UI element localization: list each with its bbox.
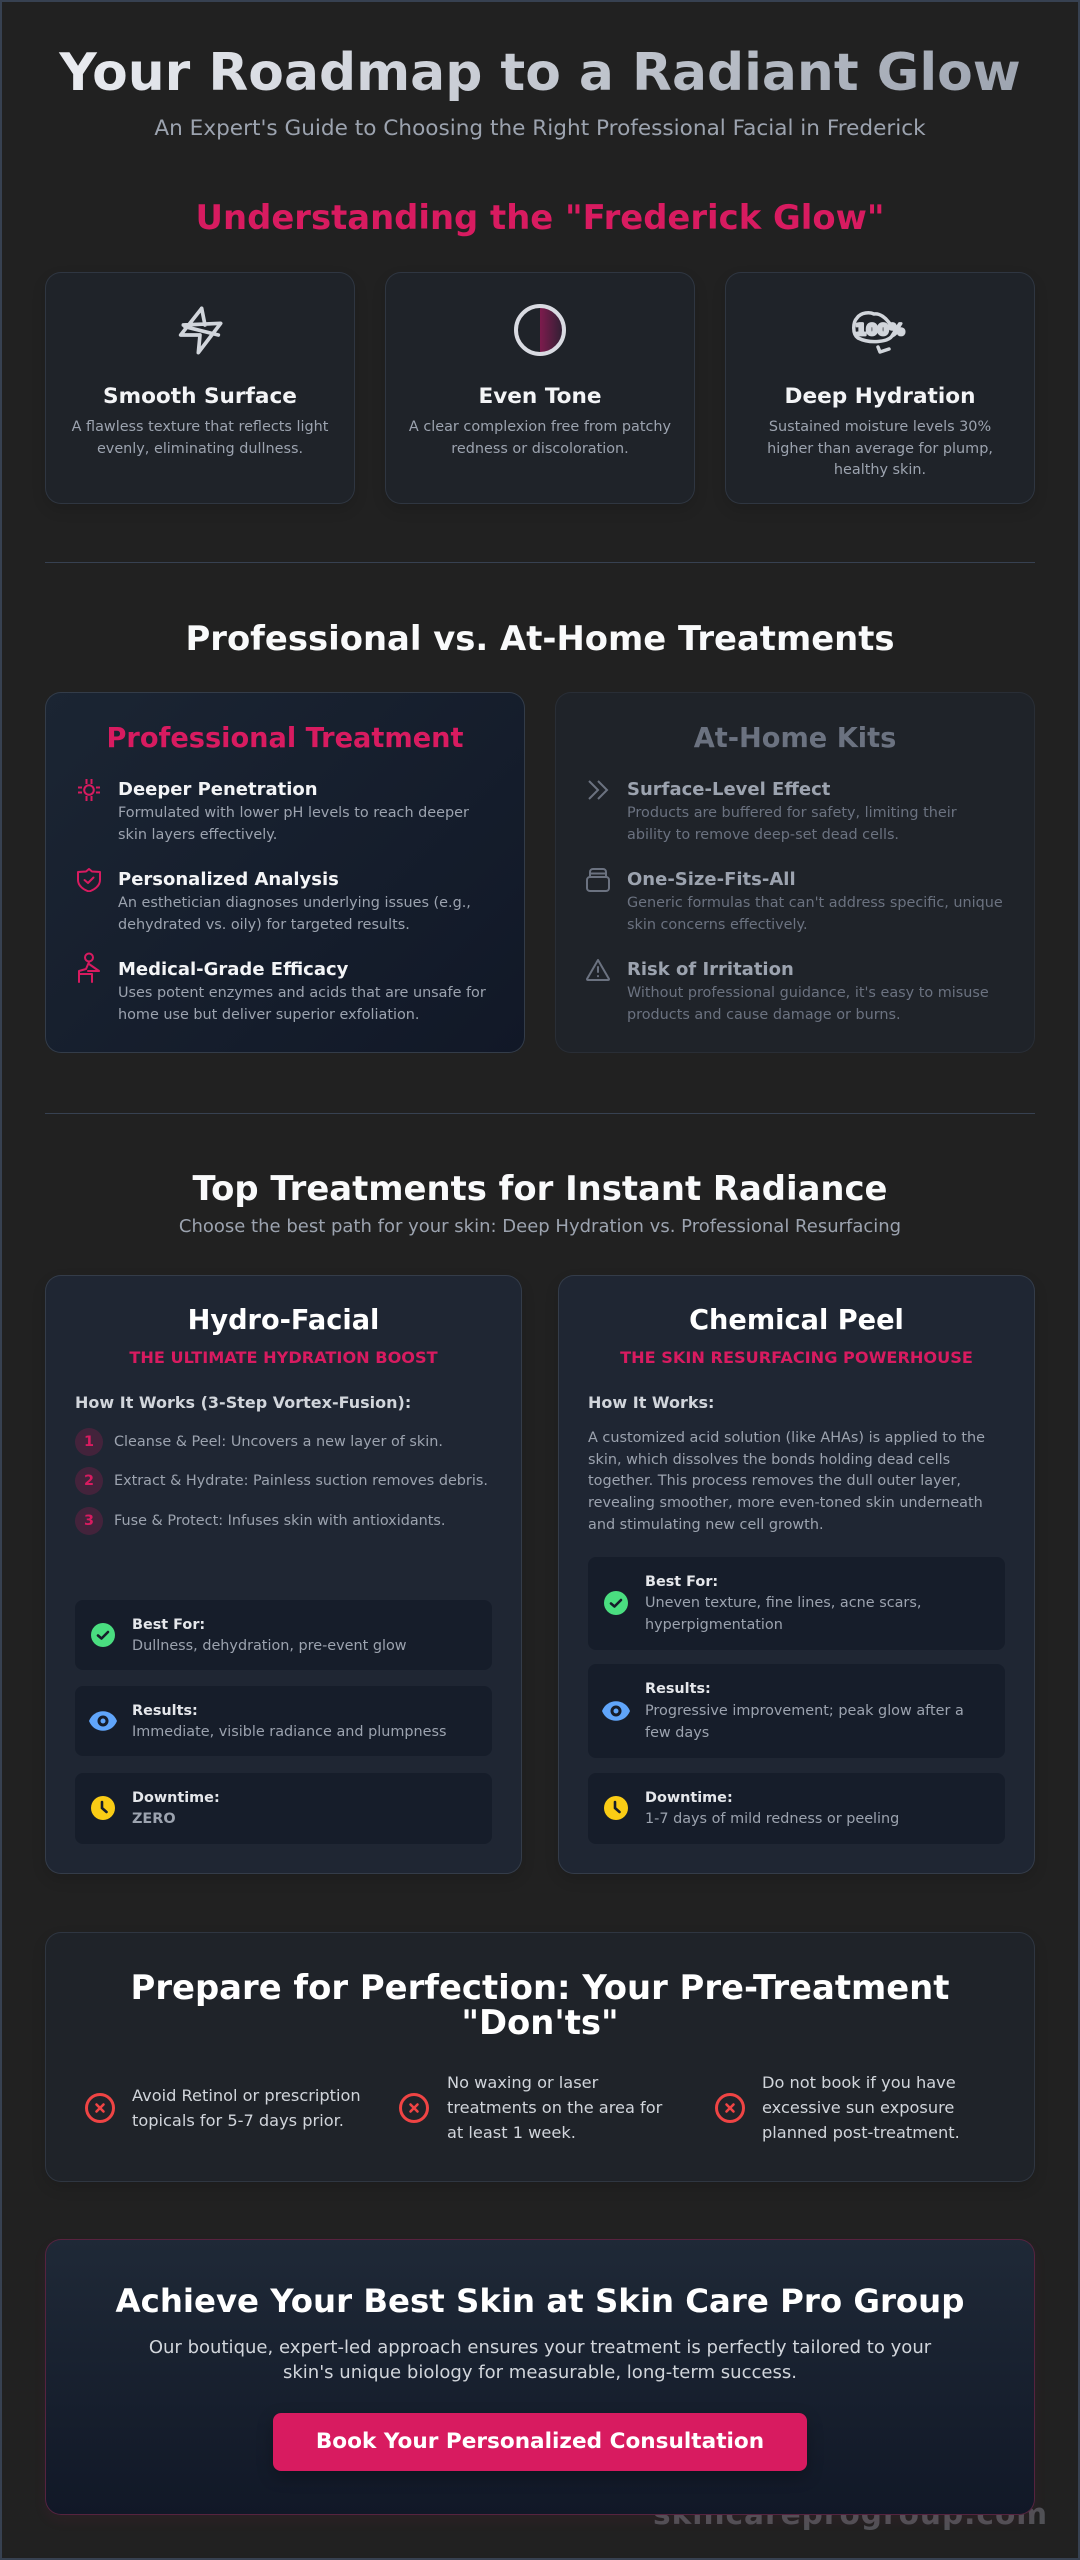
item description: dehydrated vs. oily) for targeted results.	[118, 917, 410, 933]
step 1: 1	[84, 1434, 94, 1450]
card description	[409, 419, 671, 457]
best for box: Uneven texture, fine lines, acne scars,	[645, 1595, 921, 1611]
panel: call to action	[45, 2239, 1035, 2515]
item description	[627, 805, 957, 843]
card description	[72, 419, 328, 457]
card title: Chemical Peel	[689, 1305, 904, 1336]
how it works text	[588, 1430, 985, 1533]
step 3: Fuse & Protect: Infuses skin with antioxidants.	[114, 1513, 445, 1529]
icon: eye	[89, 1711, 117, 1731]
step 1	[75, 1428, 443, 1456]
icon: x circle	[85, 2093, 115, 2123]
step 2: Extract & Hydrate: Painless suction removes debris.	[114, 1473, 488, 1489]
item title: Medical-Grade Efficacy	[118, 958, 348, 980]
best for box: Dullness, dehydration, pre-event glow	[132, 1638, 407, 1654]
cta text: Our boutique, expert-led approach ensures your treatment is perfectly tailored to your	[149, 2336, 931, 2358]
card title: Even Tone	[478, 384, 602, 409]
don't 3: planned post-treatment.	[762, 2123, 960, 2142]
panel title	[131, 1968, 949, 2042]
item description	[627, 895, 1003, 933]
item description: home use but deliver superior exfoliation.	[118, 1007, 420, 1023]
heading: understanding: Understanding the "Frederick Glow"	[196, 198, 884, 237]
don't 2: at least 1 week.	[447, 2123, 576, 2142]
card description: higher than average for plump,	[767, 441, 993, 457]
icon: x circle	[715, 2092, 745, 2122]
best for box: Best For:	[645, 1574, 718, 1590]
cta button	[273, 2413, 807, 2471]
step 3	[75, 1507, 445, 1535]
item description	[627, 985, 989, 1023]
how it works text: and stimulating new cell growth.	[588, 1517, 824, 1533]
item: risk of irritation	[586, 958, 989, 1023]
item description	[118, 895, 471, 933]
best for box	[588, 1557, 1005, 1650]
don't 1: Avoid Retinol or prescription	[132, 2086, 361, 2104]
item description: Products are buffered for safety, limiting their	[627, 805, 957, 821]
results box: few days	[645, 1725, 709, 1741]
card subtitle: THE ULTIMATE HYDRATION BOOST	[129, 1348, 438, 1366]
panel title: Prepare for Perfection: Your Pre-Treatment	[131, 1968, 949, 2006]
cta title: Achieve Your Best Skin at Skin Care Pro Group	[116, 2282, 964, 2320]
item: medical-grade efficacy	[78, 952, 486, 1023]
icon: jar	[586, 868, 610, 892]
item description: skin concerns effectively.	[627, 917, 808, 933]
panel: deep hydration	[725, 272, 1035, 504]
results box: Progressive improvement; peak glow after a	[645, 1703, 964, 1719]
how it works text: revealing smoother, more even-toned skin underneath	[588, 1495, 983, 1511]
don't 3	[715, 2070, 960, 2145]
panel: chemical peel	[558, 1275, 1035, 1874]
results box: Immediate, visible radiance and plumpness	[132, 1724, 446, 1740]
item description: Generic formulas that can't address specific, unique	[627, 895, 1003, 911]
panel: smooth surface	[45, 272, 355, 504]
icon: sun	[78, 779, 100, 801]
subtitle: An Expert's Guide to Choosing the Right Professional Facial in Frederick	[154, 116, 926, 140]
step 1: Cleanse & Peel: Uncovers a new layer of skin.	[114, 1434, 443, 1450]
item description: An esthetician diagnoses underlying issues (e.g.,	[118, 895, 471, 911]
heading: top treatments: Top Treatments for Instant Radiance	[192, 1169, 888, 1208]
item description	[118, 805, 469, 843]
card description: Sustained moisture levels 30%	[769, 419, 991, 435]
results box: Results:	[132, 1702, 198, 1718]
don't 2: No waxing or laser	[447, 2073, 598, 2092]
icon: hydration cloud	[852, 311, 906, 354]
item description: Formulated with lower pH levels to reach deeper	[118, 805, 469, 821]
item: one-size-fits-all	[586, 868, 1003, 933]
icon: seated figure	[78, 952, 100, 983]
downtime box: ZERO	[132, 1811, 176, 1827]
card description: A clear complexion free from patchy	[409, 419, 671, 435]
item: deeper penetration	[78, 778, 469, 843]
icon: half circle	[514, 304, 566, 356]
panel title: "Don'ts"	[461, 2002, 619, 2042]
card title: Deep Hydration	[785, 384, 975, 409]
results box	[75, 1686, 492, 1756]
step 2	[75, 1467, 488, 1495]
panel: hydro-facial	[45, 1275, 522, 1874]
panel heading: At-Home Kits	[694, 723, 896, 754]
icon: lightning bolt	[178, 306, 223, 354]
section subtitle: Choose the best path for your skin: Deep Hydration vs. Professional Resurfacing	[179, 1216, 901, 1237]
panel heading: Professional Treatment	[106, 723, 464, 754]
cta button: Book Your Personalized Consultation	[316, 2429, 764, 2454]
results box: Results:	[645, 1681, 711, 1697]
item: personalized analysis	[77, 868, 471, 933]
card title: Smooth Surface	[103, 384, 297, 409]
best for box	[75, 1600, 492, 1670]
card subtitle: THE SKIN RESURFACING POWERHOUSE	[620, 1348, 973, 1366]
cta text: skin's unique biology for measurable, long-term success.	[283, 2362, 797, 2383]
downtime box	[75, 1773, 492, 1844]
step 2: 2	[84, 1473, 94, 1489]
downtime box: Downtime:	[132, 1790, 220, 1806]
cta text	[45, 2334, 1035, 2386]
watermark: skincareprogroup.com	[653, 2497, 1048, 2531]
how it works heading: How It Works:	[588, 1393, 714, 1412]
don't 2: treatments on the area for	[447, 2098, 662, 2117]
item title: Surface-Level Effect	[627, 778, 830, 800]
step 3: 3	[84, 1513, 94, 1529]
icon: clock	[91, 1796, 115, 1820]
item description: Uses potent enzymes and acids that are unsafe for	[118, 985, 486, 1001]
icon: clock	[604, 1796, 628, 1820]
item description: Without professional guidance, it's easy to misuse	[627, 985, 989, 1001]
downtime box: Downtime:	[645, 1790, 733, 1806]
item description: skin layers effectively.	[118, 827, 277, 843]
icon: warning triangle	[586, 959, 610, 981]
item title: Deeper Penetration	[118, 778, 318, 800]
don't 2	[399, 2073, 662, 2142]
item description: ability to remove deep-set dead cells.	[627, 827, 899, 843]
item title: Personalized Analysis	[118, 868, 339, 890]
don't 1	[85, 2086, 361, 2130]
title: Your Roadmap to a Radiant Glow	[59, 43, 1021, 103]
item description	[118, 985, 486, 1023]
downtime box	[588, 1773, 1005, 1844]
panel: at-home kits	[555, 692, 1035, 1053]
best for box: hyperpigmentation	[645, 1617, 783, 1633]
panel: professional treatment	[45, 692, 525, 1053]
don't 1: topicals for 5-7 days prior.	[132, 2110, 344, 2130]
how it works text: A customized acid solution (like AHAs) is applied to the	[588, 1430, 985, 1446]
card title: Hydro-Facial	[188, 1305, 379, 1336]
heading: professional vs at-home: Professional vs. At-Home Treatments	[185, 619, 895, 658]
results box	[588, 1664, 1005, 1758]
icon: eye	[602, 1701, 630, 1721]
icon: x circle	[399, 2093, 429, 2123]
item title: One-Size-Fits-All	[627, 868, 796, 890]
item title: Risk of Irritation	[627, 958, 794, 980]
how it works heading: How It Works (3-Step Vortex-Fusion):	[75, 1393, 411, 1412]
card description: redness or discoloration.	[451, 441, 629, 457]
icon: check	[604, 1591, 628, 1615]
best for box: Best For:	[132, 1616, 205, 1632]
item: surface-level effect	[588, 778, 957, 843]
icon: double chevron	[588, 780, 608, 800]
icon: shield check	[77, 868, 101, 892]
card description: evenly, eliminating dullness.	[97, 441, 303, 457]
how it works text: together. This process removes the dull outer layer,	[588, 1473, 961, 1489]
card description	[767, 419, 993, 478]
item description: products and cause damage or burns.	[627, 1007, 901, 1023]
panel: even tone	[385, 272, 695, 504]
panel: pre-treatment don'ts	[45, 1932, 1035, 2182]
icon: check	[91, 1623, 115, 1647]
card description: A flawless texture that reflects light	[72, 419, 328, 435]
how it works text: skin, which dissolves the bonds holding dead cells	[588, 1452, 950, 1468]
downtime box: 1-7 days of mild redness or peeling	[645, 1811, 899, 1827]
icon: hydration cloud: 100%	[855, 320, 905, 339]
header	[58, 43, 1021, 140]
card description: healthy skin.	[834, 462, 926, 478]
don't 3: Do not book if you have	[762, 2073, 956, 2092]
don't 3: excessive sun exposure	[762, 2098, 954, 2117]
